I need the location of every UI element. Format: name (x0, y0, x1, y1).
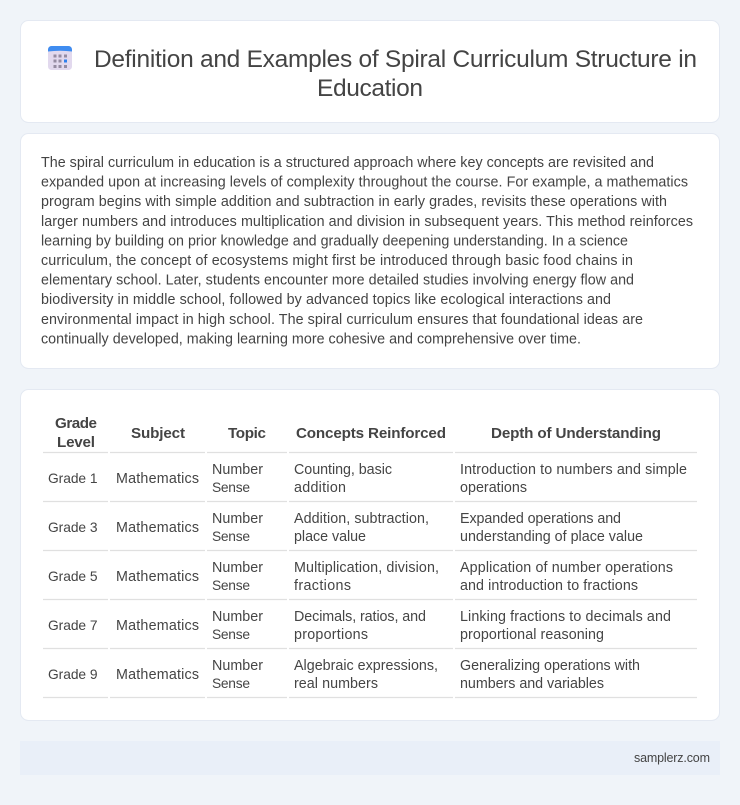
text block: spiral curriculum explanation: larger numbers and introduces multiplication and division in subsequent years. This method reinforces (41, 214, 693, 230)
row: grade 3: place value (294, 529, 366, 545)
row: grade 1: Number (212, 462, 263, 478)
title: Education (317, 75, 423, 102)
row: grade 7: Linking fractions to decimals and (460, 609, 671, 625)
table header (55, 415, 661, 451)
row: grade 9: Mathematics (116, 667, 199, 683)
row: grade 9: Number (212, 658, 263, 674)
text block: spiral curriculum explanation: biodiversity in middle school, followed by advanced topics like ecological interactions and (41, 292, 611, 308)
row: grade 7 (48, 609, 671, 643)
table header: Concepts Reinforced (296, 425, 446, 442)
title: Definition and Examples of Spiral Curriculum Structure in (94, 46, 697, 73)
row: grade 9 (48, 658, 640, 692)
icon: calendar grid (48, 46, 72, 70)
row: grade 1: operations (460, 480, 527, 496)
row: grade 1: Grade 1 (48, 471, 98, 486)
row: grade 1 (48, 462, 687, 496)
row: grade 7: Sense (212, 627, 250, 642)
row: grade 5: fractions (294, 578, 351, 594)
row: grade 3: Expanded operations and (460, 511, 621, 527)
row: grade 3 (48, 511, 643, 545)
text block: spiral curriculum explanation: expanded upon at increasing levels of complexity throughout the course. For example, a mathematics (41, 175, 688, 191)
row: grade 5: Multiplication, division, (294, 560, 439, 576)
table: grade progression (43, 415, 697, 698)
row: grade 9: numbers and variables (460, 676, 604, 692)
panel: table card (20, 390, 720, 720)
row: grade 7: Grade 7 (48, 618, 98, 633)
table header: Grade (55, 415, 97, 432)
row: grade 3: understanding of place value (460, 529, 643, 545)
row: grade 3: Sense (212, 529, 250, 544)
row: grade 1: Mathematics (116, 471, 199, 487)
text block: spiral curriculum explanation: curriculum, the concept of ecosystems might first be introduced through basic food chains in (41, 253, 633, 269)
text block: spiral curriculum explanation: continually developed, making learning more cohesive and comprehensive over time. (41, 331, 581, 347)
row: grade 1: Introduction to numbers and simple (460, 462, 687, 478)
row: grade 5: Number (212, 560, 263, 576)
row: grade 9: Sense (212, 676, 250, 691)
row: grade 7: proportions (294, 627, 368, 643)
table header: Topic (228, 425, 266, 442)
row: grade 5: Grade 5 (48, 569, 98, 584)
row: grade 9: Algebraic expressions, (294, 658, 438, 674)
row: grade 3: Grade 3 (48, 520, 98, 535)
panel: title card (20, 20, 720, 122)
text block: spiral curriculum explanation: environmental impact in high school. The spiral curriculum ensures that foundational ideas are (41, 312, 643, 328)
row: grade 7: Mathematics (116, 618, 199, 634)
text block: spiral curriculum explanation: elementary school. Later, students encounter more detailed studies involving energy flow and (41, 273, 634, 289)
row: grade 9: Grade 9 (48, 667, 98, 682)
panel: description (20, 134, 720, 368)
row lines (43, 452, 697, 698)
row: grade 1: Sense (212, 480, 250, 495)
row: grade 3: Number (212, 511, 263, 527)
row: grade 3: Mathematics (116, 520, 199, 536)
row: grade 1: Counting, basic (294, 462, 392, 478)
row: grade 7: Decimals, ratios, and (294, 609, 426, 625)
text block: spiral curriculum explanation (41, 155, 693, 347)
text block: spiral curriculum explanation: program begins with simple addition and subtraction in early grades, revisits these operations with (41, 194, 667, 210)
row: grade 7: proportional reasoning (460, 627, 604, 643)
footer source: samplerz.com (634, 751, 710, 765)
table header: Subject (131, 425, 185, 442)
row: grade 5: and introduction to fractions (460, 578, 638, 594)
row: grade 1: addition (294, 480, 346, 496)
title (94, 46, 697, 102)
footer bar (20, 741, 720, 775)
row: grade 5: Sense (212, 578, 250, 593)
row: grade 9: Generalizing operations with (460, 658, 640, 674)
text block: spiral curriculum explanation: The spiral curriculum in education is a structured approach where key concepts are revisited and (41, 155, 654, 171)
row: grade 7: Number (212, 609, 263, 625)
table header: Depth of Understanding (491, 425, 661, 442)
row: grade 5: Application of number operations (460, 560, 673, 576)
row: grade 5: Mathematics (116, 569, 199, 585)
text block: spiral curriculum explanation: learning by building on prior knowledge and gradually deepening understanding. In a science (41, 233, 628, 249)
table header: Level (57, 434, 95, 451)
row: grade 3: Addition, subtraction, (294, 511, 429, 527)
row: grade 9: real numbers (294, 676, 378, 692)
row: grade 5 (48, 560, 673, 594)
